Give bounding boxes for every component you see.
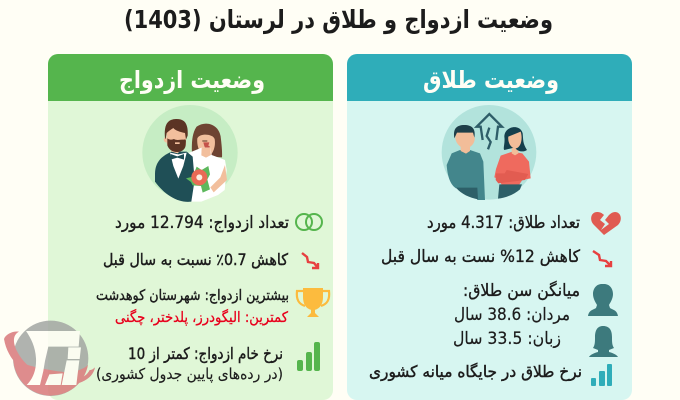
marriage change row: کاهش 0.7٪ نسبت به سال قبل xyxy=(103,250,288,270)
rate note: (در رده‌های پایین جدول کشوری) xyxy=(96,365,283,384)
divorce header xyxy=(347,54,632,101)
icon: teal bars xyxy=(591,364,612,386)
panel: divorce xyxy=(347,54,632,400)
divorce change row: کاهش 12% نست به سال قبل xyxy=(381,247,581,267)
icon: falling arrow xyxy=(593,251,611,266)
women age: زبان: 33.5 سال xyxy=(453,329,561,349)
icon: rings xyxy=(296,214,322,230)
divorce count row: تعداد طلاق: 4.317 مورد xyxy=(427,213,580,233)
icon: falling arrow xyxy=(302,253,318,268)
marriage heading: وضعیت ازدواج xyxy=(119,66,265,94)
divorce age block xyxy=(453,280,618,357)
marriage highest/lowest row xyxy=(96,288,329,326)
marriage header xyxy=(48,54,333,101)
icon: woman xyxy=(589,326,618,357)
icon: green bars xyxy=(297,342,320,371)
marriage rate row xyxy=(96,342,320,384)
marriage highest/lowest row: بیشترین ازدواج: شهرستان کوهدشت xyxy=(96,288,289,305)
men age: مردان: 38.6 سال xyxy=(454,305,570,325)
watermark logo xyxy=(4,321,95,396)
icon: man xyxy=(588,284,618,316)
divorce rate row: نرخ طلاق در جایگاه میانه کشوری xyxy=(369,362,582,382)
title: وضعیت ازدواج و طلاق در لرستان (1403) xyxy=(124,5,553,35)
marriage rate row: نرخ خام ازدواج: کمتر از 10 xyxy=(128,344,283,364)
marriage count row: تعداد ازدواج: 12.794 مورد xyxy=(115,213,289,233)
divorce age block: میانگن سن طلاق: xyxy=(463,280,580,301)
icon: bride and groom xyxy=(142,105,238,202)
panel: marriage xyxy=(48,54,333,400)
icon: separated couple xyxy=(442,105,536,200)
divorce heading: وضعیت طلاق xyxy=(423,66,559,94)
lowest cities: کمترین: الیگودرز، پلدختر، چگنی xyxy=(115,309,288,326)
icon: trophy xyxy=(297,288,329,317)
icon: broken heart xyxy=(591,212,621,235)
